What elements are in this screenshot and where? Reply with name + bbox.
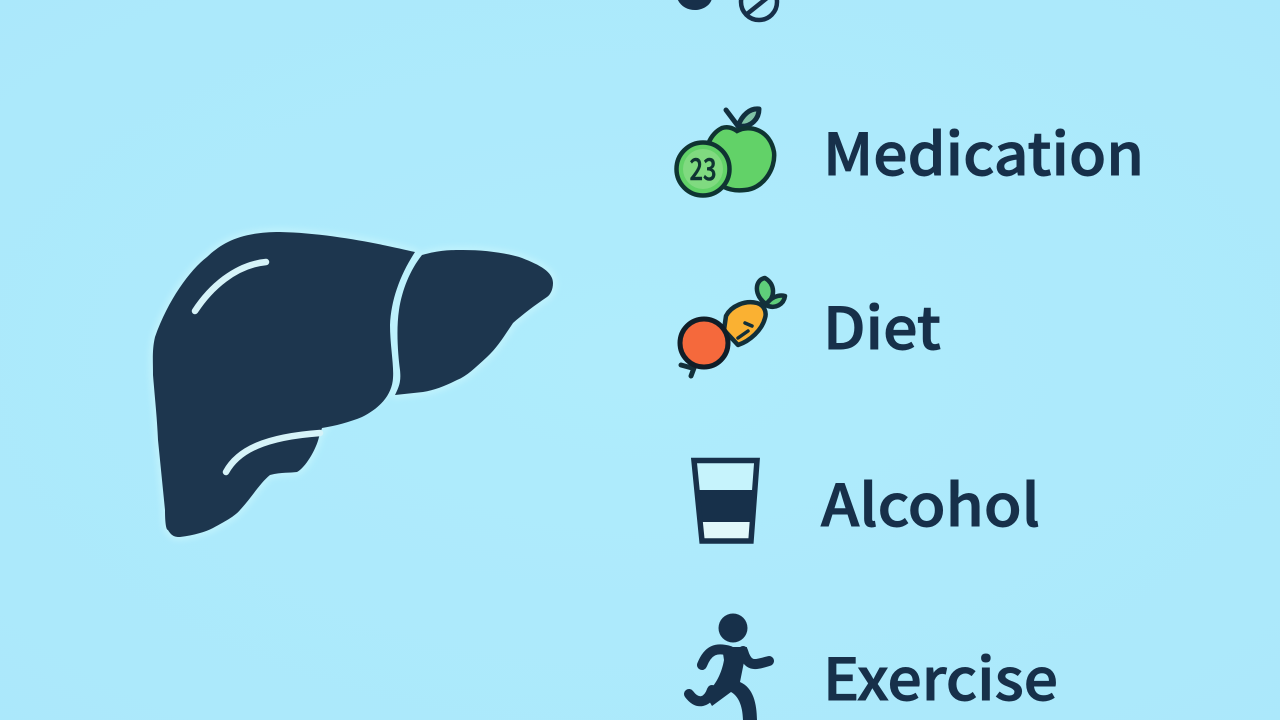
runner torso: [705, 647, 757, 720]
label: Medication: Medication: [823, 108, 1144, 192]
tomato stem: [681, 365, 694, 376]
carrot notch: [738, 323, 752, 338]
slice seeds: 23: [690, 145, 716, 189]
apple body: [705, 127, 774, 190]
icon: glass: [694, 460, 757, 541]
glass liquid: [699, 490, 753, 523]
icon: liver: [153, 232, 553, 537]
runner body: [689, 649, 769, 701]
label: Diet: Diet: [823, 282, 941, 366]
apple slice: [676, 142, 730, 196]
glass upper: [695, 460, 757, 492]
liver left lobe: [395, 250, 553, 395]
icon: pills: [677, 0, 777, 20]
label: Exercise: Exercise: [823, 633, 1058, 717]
liver highlight: [195, 262, 266, 311]
glass base: [702, 522, 750, 541]
carrot body: [724, 302, 766, 345]
runner head: [718, 614, 748, 642]
outlined pill: [741, 0, 777, 20]
liver lower crease: [226, 433, 320, 472]
icon: runner: [689, 614, 769, 720]
label: Alcohol: Alcohol: [821, 459, 1040, 543]
liver glow: [153, 232, 553, 537]
liver main lobe: [153, 232, 415, 537]
carrot leaves: [757, 278, 785, 307]
icon: carrot and tomato: [680, 278, 785, 376]
tomato: [680, 319, 728, 367]
dark pill: [677, 0, 712, 10]
glass outline: [694, 460, 757, 541]
icon: apple: [676, 109, 774, 196]
apple stem and leaf: [726, 110, 738, 126]
